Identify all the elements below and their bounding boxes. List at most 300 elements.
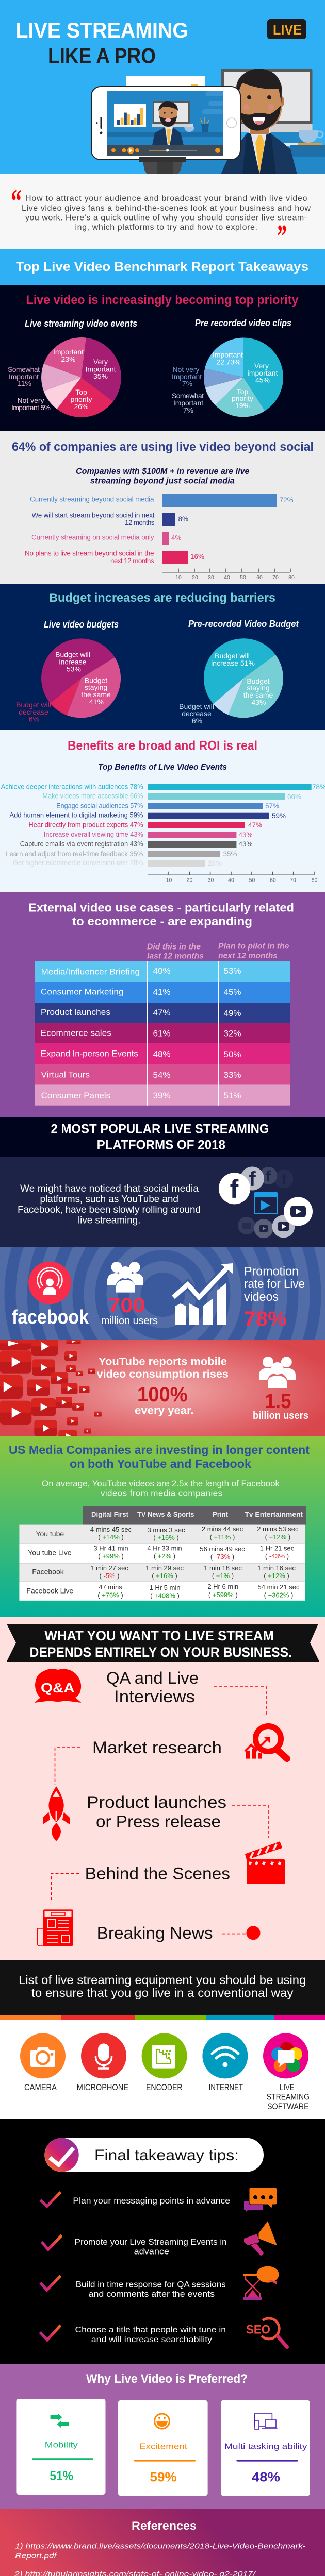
panel: hero	[0, 0, 325, 174]
pie chart: pre-recorded video budget: Budget	[247, 677, 270, 685]
stat: mobile video consumption: 100%	[137, 1383, 188, 1406]
pie chart: pre recorded video clips: 19%	[235, 401, 250, 410]
bar chart: top benefits: 57%	[265, 802, 279, 810]
stat: 700 million users	[101, 1294, 158, 1327]
bar chart: streaming beyond social: 50	[240, 574, 246, 581]
bar chart: top benefits: 10	[166, 877, 172, 883]
item: product launches: or Press release	[96, 1812, 221, 1831]
icon: live person	[28, 1262, 71, 1304]
pie chart: pre-recorded video budget: Budget will	[179, 702, 214, 710]
bar chart: top benefits: 35%	[223, 850, 237, 858]
table: video length by company type: ( +16% )	[152, 1572, 177, 1580]
pie chart: live streaming video events: 35%	[93, 372, 108, 380]
item: QA and live interviews: QA and Live	[106, 1669, 199, 1687]
icons: youtube play buttons	[0, 1336, 102, 1441]
section heading band: takeaways	[0, 249, 325, 285]
panel: youtube stats	[0, 1336, 325, 1441]
subheading: On average, YouTube videos are 2.5x the length of Facebook	[42, 1479, 280, 1488]
pie chart: live video budgets: 41%	[89, 698, 104, 706]
table: video length by company type: ( +12% )	[264, 1572, 289, 1580]
bar chart: streaming beyond social: 72%	[280, 496, 294, 504]
table: video length by company type	[19, 1506, 306, 1601]
bar chart: top benefits: Increase overall viewing time 43%	[44, 831, 143, 838]
icon: clapperboard	[245, 1841, 285, 1884]
panel: top priority	[0, 285, 325, 431]
pie chart: live streaming video events: priority	[70, 395, 92, 403]
table: use cases: Ecommerce sales	[41, 1028, 111, 1038]
card: mobility: 51%	[50, 2469, 73, 2483]
pie chart: pre recorded video clips: 45%	[255, 376, 270, 384]
pie chart: live video budgets: Budget will	[55, 651, 90, 659]
pie chart: live video budgets: decrease	[19, 708, 48, 716]
banner: DEPENDS ENTIRELY ON YOUR BUSINESS.	[30, 1645, 292, 1660]
bar chart: top benefits: 30	[208, 877, 214, 883]
intro text: How to attract your audience and broadcast your brand with live video	[25, 194, 307, 203]
table: use cases: 53%	[224, 966, 241, 976]
tip: time for response	[40, 2266, 279, 2300]
intro text: you work. Here’s a quick outline of why you should consider live stream-	[25, 213, 307, 223]
table: video length by company type: 2 mins 53 sec	[257, 1525, 299, 1533]
table: use cases: 45%	[224, 987, 241, 997]
heading: Budget increases are reducing barriers	[49, 591, 275, 605]
bar chart: top benefits: 70	[290, 877, 296, 883]
column headings: Plan to pilot in the	[218, 942, 289, 951]
chart title: Companies with $100M + in revenue are live	[76, 466, 250, 476]
icons: facebook and youtube circles: f	[249, 1168, 256, 1191]
column headings: Did this in the	[147, 943, 201, 951]
table: use cases: Product launches	[41, 1007, 110, 1017]
card: multi tasking: Multi tasking ability	[224, 2442, 307, 2451]
pie chart: live video budgets: 6%	[29, 715, 39, 723]
card: multi tasking: 48%	[252, 2470, 280, 2484]
heading	[9, 1443, 310, 1470]
title: like a pro: LIKE A PRO	[48, 43, 156, 68]
bar chart: top benefits: 50	[249, 877, 255, 883]
bar chart: streaming beyond social: next 12 months	[110, 557, 154, 565]
section heading band: equipment: to ensure that you go live in a conventional way	[31, 1986, 294, 1999]
bar chart: top benefits: Make videos more accessible 66%	[42, 792, 143, 800]
item: product launches: Product launches	[87, 1793, 226, 1811]
icon: magnifier with chart	[245, 1726, 287, 1759]
chart title: streaming beyond just social media	[90, 476, 235, 486]
item: market research: Market research	[92, 1738, 222, 1757]
panel: social platforms intro	[0, 1157, 325, 1247]
table: video length by company type: ( +16% )	[153, 1534, 179, 1541]
bar chart: streaming beyond social: 10	[175, 574, 182, 581]
table: video length by company type: ( +12% )	[265, 1533, 290, 1541]
icon: users	[259, 1357, 296, 1388]
table: video length by company type: ( +76% )	[98, 1591, 123, 1599]
section heading band: equipment	[0, 1960, 325, 2020]
bar chart: streaming beyond social: Currently streaming beyond social media	[30, 496, 154, 503]
pie chart: live streaming video events: Top	[75, 388, 87, 396]
icons: facebook and youtube circles: f	[281, 1171, 286, 1187]
pie chart: pre recorded video clips: Important	[173, 399, 203, 407]
pie chart: pre recorded video clips: Top	[237, 387, 248, 396]
pie chart: live streaming video events	[8, 337, 121, 417]
pie chart: live streaming video events: 26%	[74, 402, 89, 411]
table: use cases: 39%	[153, 1091, 171, 1100]
bar chart: streaming beyond social: We will start stream beyond social in next	[32, 512, 155, 519]
table: video length by company type: 2 Hr 6 min	[207, 1583, 238, 1590]
table: video length by company type: ( +408% )	[150, 1592, 180, 1599]
table: video length by company type: 4 mins 45 sec	[90, 1526, 132, 1533]
tip: plan messaging: Plan your messaging points in advance	[73, 2196, 230, 2206]
bar chart: streaming beyond social: 8%	[178, 515, 188, 523]
pie chart: pre recorded video clips	[172, 337, 283, 417]
pie chart: live streaming video events: 23%	[61, 355, 75, 363]
table: video length by company type: 1 min 18 sec	[204, 1564, 242, 1572]
illustration: presenter filmed on a phone	[91, 69, 325, 174]
pie chart: pre recorded video clips: Very	[254, 362, 269, 370]
subheading	[42, 1479, 280, 1498]
column headings	[147, 942, 289, 961]
pie chart: live streaming video events: Not very	[17, 396, 44, 404]
bar chart: top benefits	[1, 783, 325, 883]
table: video length by company type: 54 min 21 sec	[258, 1583, 300, 1591]
table: use cases: 49%	[224, 1008, 241, 1018]
labels: equipment names: CAMERA	[24, 2082, 57, 2092]
stat: 1.5 billion users	[253, 1390, 308, 1421]
stat: promotion rate: videos	[244, 1290, 279, 1304]
table: use cases: 61%	[153, 1028, 171, 1039]
bar chart: top benefits: 47%	[248, 821, 262, 829]
pie chart: pre-recorded video budget: 43%	[251, 698, 266, 706]
bar chart: top benefits: Achieve deeper interactions with audiences 78%	[1, 783, 143, 791]
bar chart: top benefits: Learn and adjust from real-time feedback 35%	[6, 850, 143, 858]
pie chart: live streaming video events: Important	[9, 372, 39, 381]
table: video length by company type: You tube Live	[28, 1549, 72, 1557]
reference list: 1) https://www.brand.live/assets/documents/2018-Live-Video-Benchmark-	[15, 2541, 306, 2550]
heading: References	[132, 2519, 197, 2532]
bar chart: streaming beyond social: No plans to live stream beyond social in the	[25, 550, 154, 557]
table: video length by company type: 1 min 27 sec	[90, 1564, 128, 1572]
tip: title and searchability	[40, 2318, 287, 2347]
bar chart: streaming beyond social: Currently streaming on social media only	[31, 534, 154, 541]
bar chart: streaming beyond social: 20	[192, 574, 198, 581]
pie chart: pre-recorded video budget: Budget will	[215, 652, 250, 660]
heading pill	[44, 2138, 264, 2172]
bar chart: streaming beyond social: 60	[256, 574, 263, 581]
heading: External video use cases - particularly related	[28, 901, 294, 914]
bar chart: top benefits: 80	[312, 877, 317, 883]
stat: mobile video consumption: video consumption rises	[97, 1368, 229, 1380]
icon: users	[107, 1262, 143, 1293]
pie chart: live video budgets: 53%	[67, 665, 81, 673]
icon: encoder	[142, 2033, 187, 2078]
icon: rising chart	[173, 1263, 233, 1325]
pie chart: pre recorded video clips: 7%	[182, 380, 192, 388]
bar chart: top benefits: Hear directly from product experts 47%	[29, 821, 143, 828]
stat: promotion rate	[244, 1265, 305, 1330]
card: excitement: 59%	[150, 2470, 177, 2484]
badge: live	[267, 19, 306, 39]
bar chart: streaming beyond social: 16%	[190, 553, 204, 561]
section heading band: equipment: List of live streaming equipment you should be using	[19, 1973, 306, 1987]
section heading band: platforms: PLATFORMS OF 2018	[97, 1138, 225, 1153]
table: video length by company type: ( -43% )	[265, 1552, 289, 1560]
pie chart: pre recorded video clips: important	[248, 369, 278, 377]
pie chart: live video budgets: staying	[85, 683, 107, 691]
section heading band: takeaways: Top Live Video Benchmark Report Takeaways	[16, 260, 308, 274]
reference list	[14, 2541, 306, 2576]
panel: final takeaway tips	[0, 2119, 325, 2364]
stat: 700 million users: 700	[108, 1294, 145, 1317]
icon: Q&A bubble	[35, 1669, 82, 1703]
bar chart: top benefits: 60	[270, 877, 276, 883]
icon: Q&A bubble: Q&A	[41, 1680, 75, 1696]
pie chart: pre recorded video clips: 22.73%	[216, 358, 241, 366]
column headings: next 12 months	[218, 952, 278, 960]
table: use cases: 33%	[224, 1070, 241, 1080]
heading: 64% of companies are using live video beyond social	[12, 440, 314, 454]
subheading: live budgets: Live video budgets	[44, 619, 119, 630]
pie chart: live streaming video events: Important	[86, 365, 116, 373]
tip: plan messaging	[40, 2188, 277, 2212]
intro text: platforms, such as YouTube and	[40, 1194, 178, 1205]
section heading band: platforms: 2 MOST POPULAR LIVE STREAMING	[51, 1122, 269, 1137]
table: use cases: Media/Influencer Briefing	[41, 967, 140, 976]
table: video length by company type: 56 mins 49 sec	[200, 1545, 245, 1553]
bar chart: streaming beyond social: 30	[208, 574, 214, 581]
icon: camera	[20, 2033, 66, 2078]
icon: streaming software	[263, 2033, 308, 2078]
item: product launches	[87, 1793, 226, 1831]
bar chart: top benefits: 40	[228, 877, 234, 883]
bar chart: streaming beyond social: 70	[272, 574, 279, 581]
banner	[6, 1624, 320, 1662]
icon: rocket	[43, 1786, 70, 1841]
bar chart: top benefits: Add human element to digital marketing 59%	[9, 811, 143, 819]
pie chart: live video budgets	[16, 638, 121, 723]
card: mobility	[16, 2399, 106, 2495]
subheading: live streaming: Live streaming video events	[25, 318, 137, 329]
panel: external use cases	[0, 892, 325, 1117]
logo: facebook: facebook	[12, 1307, 89, 1328]
table: use cases	[35, 961, 290, 1106]
bar chart: streaming beyond social: 40	[224, 574, 230, 581]
stat: promotion rate: rate for Live	[244, 1277, 305, 1291]
intro text: Live video gives fans a behind-the-scenes look at your business and how	[22, 204, 311, 213]
table: video length by company type: ( +2% )	[154, 1552, 175, 1560]
pie chart: pre-recorded video budget: the same	[243, 691, 273, 699]
stat: promotion rate: Promotion	[244, 1265, 299, 1279]
panel: beyond social	[0, 431, 325, 584]
panel: benefits	[0, 730, 325, 892]
table: video length by company type: You tube	[36, 1530, 64, 1538]
intro text: Facebook, have been slowly rolling around	[18, 1205, 201, 1215]
icons: facebook and youtube circles	[219, 1166, 313, 1238]
table: video length by company type: Print	[213, 1511, 228, 1518]
heading: US Media Companies are investing in longer content	[9, 1443, 310, 1456]
table: use cases: 41%	[153, 987, 171, 997]
badge: live: LIVE	[273, 22, 302, 38]
heading: to ecommerce - are expanding	[72, 914, 252, 928]
table: use cases: 47%	[153, 1008, 171, 1018]
pie chart: live video budgets: the same	[81, 690, 111, 699]
table: video length by company type: TV News & Sports	[137, 1511, 194, 1518]
table: video length by company type: Facebook	[32, 1568, 64, 1576]
tip: promote events	[42, 2221, 277, 2256]
bar chart: top benefits: 43%	[238, 831, 253, 839]
table: use cases: Consumer Panels	[41, 1091, 110, 1100]
table: video length by company type: ( +14% )	[98, 1533, 124, 1541]
bar chart: streaming beyond social: 4%	[171, 534, 182, 542]
pie chart: live video budgets: Budget	[85, 676, 107, 684]
panel: references	[0, 2509, 325, 2576]
pie chart: live streaming video events: Somewhat	[8, 365, 40, 374]
pie chart: pre recorded video clips: priority	[232, 394, 253, 402]
table: use cases: 32%	[224, 1028, 241, 1039]
bar chart: streaming beyond social: 80	[288, 574, 295, 581]
labels: equipment names: INTERNET	[209, 2082, 243, 2092]
table: use cases: 40%	[153, 966, 171, 976]
pie chart: pre recorded video clips: 7%	[183, 406, 193, 414]
heading: on both YouTube and Facebook	[70, 1457, 251, 1470]
tip: title and searchability: Choose a title that people with tune in	[75, 2326, 226, 2334]
labels: equipment names: MICROPHONE	[77, 2082, 128, 2092]
bar chart: top benefits: 43%	[238, 840, 253, 848]
icon: red dot	[247, 1926, 260, 1940]
stat: mobile video consumption: every year.	[135, 1405, 194, 1417]
labels: equipment names: STREAMING	[267, 2092, 310, 2102]
icons: facebook and youtube circles: f	[266, 1168, 271, 1185]
heading pill: Final takeaway tips:	[94, 2147, 239, 2164]
bar chart: top benefits: 66%	[287, 793, 301, 801]
panel: US media companies	[0, 1436, 325, 1617]
stat: 1.5 billion users: 1.5	[265, 1390, 291, 1413]
table: video length by company type: 4 Hr 33 min	[147, 1545, 182, 1552]
icon: wifi	[202, 2033, 248, 2078]
table: video length by company type: 47 mins	[99, 1583, 122, 1591]
tip: time for response: and comments after the events	[89, 2289, 215, 2299]
panel: facebook stats	[0, 1247, 325, 1340]
reference list: Report.pdf	[15, 2552, 57, 2561]
intro text: ing, which platforms to try and how to explore.	[75, 223, 257, 232]
table: video length by company type: ( +1% )	[212, 1572, 234, 1580]
pie chart: live video budgets: Budget will	[16, 701, 51, 709]
card: mobility: Mobility	[45, 2441, 78, 2450]
table: video length by company type: 1 min 29 sec	[145, 1564, 184, 1572]
bar chart: streaming beyond social: 12 months	[125, 519, 155, 527]
pie chart: live streaming video events: 11%	[18, 379, 31, 387]
intro text: We might have noticed that social media	[20, 1183, 199, 1194]
pie chart: live streaming video events: Important	[53, 348, 84, 356]
section heading band: platforms	[0, 1117, 325, 1157]
heading: Benefits are broad and ROI is real	[68, 739, 257, 753]
column headings: last 12 months	[147, 952, 204, 961]
icon: opening quote: “	[11, 182, 22, 219]
bar chart: top benefits: Capture emails via event registration 43%	[20, 840, 143, 848]
pie chart: pre-recorded video budget	[179, 638, 283, 725]
heading: Live video is increasingly becoming top priority	[26, 293, 299, 307]
pie chart: pre recorded video clips: Important	[213, 351, 243, 359]
pie chart: pre-recorded video budget: 6%	[192, 717, 202, 725]
pie chart: pre-recorded video budget: decrease	[182, 709, 212, 718]
pie chart: pre recorded video clips: Not very	[172, 365, 200, 374]
table: use cases: 54%	[153, 1070, 171, 1080]
pie chart: live streaming video events: Important 5%	[11, 403, 51, 412]
panel: budgets	[0, 584, 325, 730]
bar chart: streaming beyond social	[25, 494, 295, 581]
subheading: videos from media companies	[101, 1488, 222, 1498]
card: excitement	[118, 2400, 208, 2496]
chart title	[76, 466, 250, 486]
stat: 700 million users: million users	[101, 1315, 158, 1327]
subheading: pre recorded: Pre recorded video clips	[195, 318, 291, 328]
item: breaking news: Breaking News	[97, 1924, 213, 1942]
icons: facebook and youtube circles: f	[230, 1175, 239, 1204]
stat: mobile video consumption: YouTube reports mobile	[99, 1356, 227, 1368]
item: QA and live interviews	[106, 1669, 199, 1706]
table: use cases: 48%	[153, 1049, 171, 1059]
pie chart: pre recorded video clips: Somewhat	[172, 392, 204, 400]
banner: WHAT YOU WANT TO LIVE STREAM	[44, 1628, 274, 1643]
labels: equipment names: LIVE	[280, 2082, 295, 2092]
table: video length by company type: 2 mins 44 sec	[202, 1525, 243, 1533]
table: use cases: Expand In-person Events	[41, 1048, 138, 1058]
table: video length by company type: 3 Hr 41 min	[93, 1545, 128, 1552]
labels: equipment names: SOFTWARE	[267, 2102, 309, 2111]
bar chart: top benefits: 20	[187, 877, 192, 883]
intro text	[18, 1183, 201, 1226]
bar chart: top benefits: Engage social audiences 57%	[56, 802, 143, 809]
title: live streaming: LIVE STREAMING	[15, 18, 188, 42]
stat: promotion rate: 78%	[244, 1308, 287, 1330]
bar chart: top benefits: 59%	[272, 812, 286, 820]
intro text	[22, 194, 311, 232]
table: video length by company type: Tv Entertainment	[245, 1511, 303, 1518]
table: video length by company type: ( +599% )	[208, 1591, 238, 1599]
icon: newspaper	[37, 1909, 73, 1946]
table: video length by company type: ( +99% )	[98, 1552, 124, 1560]
tip: title and searchability: and will increase searchability	[91, 2335, 212, 2344]
pie chart: pre-recorded video budget: increase 51%	[211, 659, 255, 667]
table: video length by company type: ( -5% )	[99, 1572, 120, 1580]
labels: equipment names	[24, 2082, 310, 2111]
pie chart: pre-recorded video budget: staying	[247, 684, 270, 692]
panel: equipment	[0, 2020, 325, 2119]
heading: Why Live Video is Preferred?	[86, 2372, 248, 2386]
table: video length by company type: 1 min 16 sec	[257, 1564, 296, 1572]
item: QA and live interviews: Interviews	[114, 1687, 195, 1706]
pie chart: live video budgets: increase	[59, 658, 87, 666]
panel: what to live stream	[0, 1617, 325, 1960]
tip: promote events: Promote your Live Streaming Events in	[75, 2237, 227, 2247]
table: video length by company type: Digital First	[91, 1511, 128, 1518]
labels: equipment names: ENCODER	[146, 2082, 183, 2092]
icon: microphone	[81, 2033, 126, 2078]
icon: closing quote: ”	[277, 218, 287, 255]
heading	[28, 901, 294, 928]
bar chart: top benefits: 28%	[208, 859, 222, 867]
pie chart: live streaming video events: Very	[93, 358, 108, 366]
table: use cases: 51%	[224, 1091, 241, 1100]
table: use cases: Consumer Marketing	[41, 987, 124, 997]
table: video length by company type: ( +11% )	[210, 1533, 235, 1541]
table: video length by company type: ( -73% )	[210, 1553, 234, 1561]
panel: intro quote	[0, 174, 325, 255]
tip: time for response: Build in time response for QA sessions	[76, 2280, 226, 2290]
subheading: pre-recorded budgets: Pre-recorded Video Budget	[188, 619, 299, 629]
pie chart: pre recorded video clips: Important	[172, 372, 202, 381]
card: excitement: Excitement	[139, 2442, 188, 2451]
table: use cases: Virtual Tours	[41, 1070, 90, 1079]
bar chart: top benefits: Get higher ecommerce conversion rate 28%	[13, 859, 143, 867]
tip: title and searchability: SEO	[246, 2323, 270, 2336]
item: behind the scenes: Behind the Scenes	[85, 1864, 230, 1883]
panel: why live video is preferred	[0, 2364, 325, 2509]
